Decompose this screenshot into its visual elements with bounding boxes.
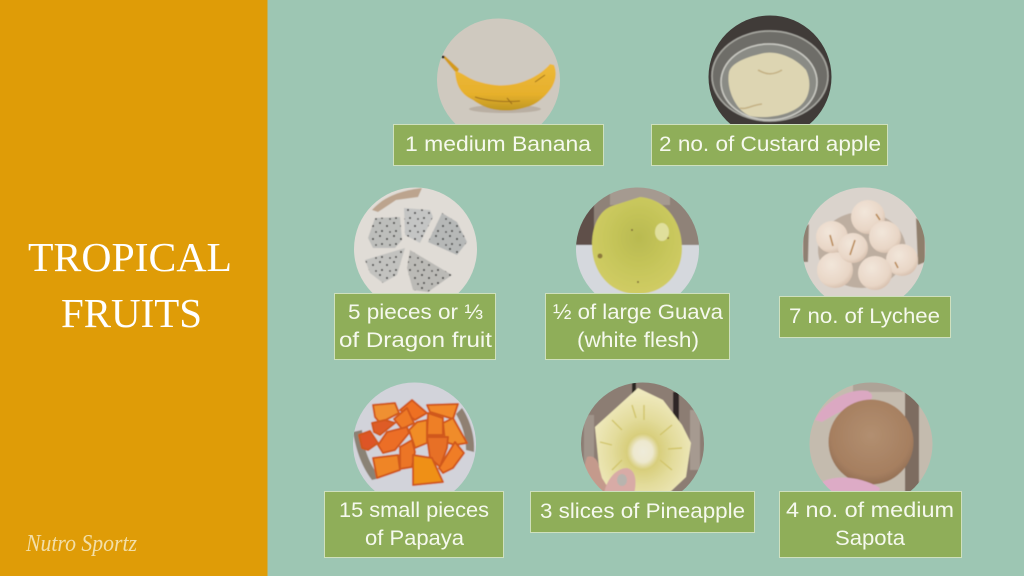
label: papaya (324, 492, 504, 558)
label: papaya: of Papaya (365, 527, 464, 550)
photo: pineapple (581, 382, 704, 491)
photo: banana (437, 18, 560, 124)
title: FRUITS (61, 290, 202, 336)
logo: Nutro Sportz: Nutro Sportz (25, 531, 138, 557)
photo: guava (576, 188, 699, 293)
label: guava: (white flesh) (577, 329, 699, 352)
label: guava: ½ of large Guava (553, 301, 723, 324)
label: banana: 1 medium Banana (405, 133, 591, 156)
label: guava (546, 294, 730, 360)
label: sapota: Sapota (835, 527, 905, 550)
label: lychee (780, 296, 950, 338)
title: TROPICAL (28, 234, 232, 280)
title (28, 234, 232, 336)
panel: title sidebar (0, 0, 268, 576)
label: dragon fruit: 5 pieces or ⅓ (348, 301, 484, 324)
label: sapota (780, 492, 962, 558)
label: pineapple (530, 492, 754, 532)
label: dragon fruit (334, 294, 496, 360)
photo: papaya (353, 382, 476, 491)
label: sapota: 4 no. of medium (786, 499, 954, 522)
photo: sapota (810, 382, 932, 491)
label: dragon fruit: of Dragon fruit (339, 329, 492, 352)
label: custard apple (652, 124, 888, 166)
label: lychee: 7 no. of Lychee (789, 305, 940, 328)
label: banana (394, 124, 604, 166)
label: custard apple: 2 no. of Custard apple (659, 133, 881, 156)
photo: lychee (802, 188, 926, 296)
photo: custard apple (708, 16, 832, 124)
photo: dragon fruit (354, 188, 477, 293)
label: pineapple: 3 slices of Pineapple (540, 500, 745, 523)
label: papaya: 15 small pieces (339, 499, 489, 522)
